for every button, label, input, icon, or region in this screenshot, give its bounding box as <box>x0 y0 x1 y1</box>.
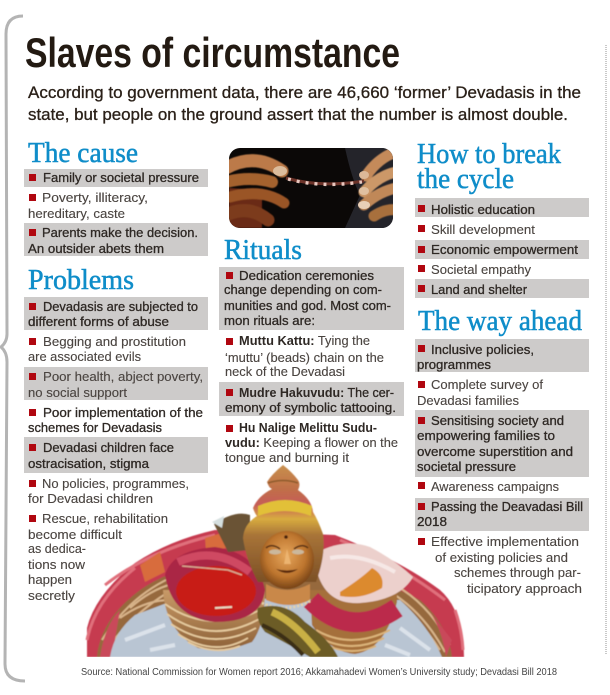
item: dedication ceremonies <box>219 267 404 330</box>
item: abuse <box>24 297 208 330</box>
item: complete survey: Devadasi families <box>417 393 519 408</box>
item: poor health: no social support <box>28 385 127 400</box>
item: complete survey <box>417 377 543 408</box>
plastic bag with offerings <box>318 543 413 603</box>
panel: rituals <box>219 235 404 465</box>
item: ostracisation: ostracisation, stigma <box>28 456 150 471</box>
item: poor implementation <box>28 405 203 435</box>
panel: problems <box>24 265 208 603</box>
item: hu nalige melittu suduvudu: vudu: Keeping a flower on the <box>225 435 398 450</box>
intro text: According to government data, there are 46,660 ‘former’ Devadasis in the <box>28 83 581 102</box>
item: ostracisation: Devadasi children face <box>43 440 174 455</box>
item: effective implementation: Effective implementation <box>431 534 579 549</box>
item: poor health: Poor health, abject poverty, <box>43 369 203 384</box>
item: sensitising society: empowering families to <box>417 428 555 443</box>
title: Slaves of circumstance <box>25 29 400 76</box>
item: holistic education <box>415 198 589 217</box>
panel: how to break the cycle <box>415 139 589 298</box>
item: poor implementation: schemes for Devadasis <box>28 420 162 435</box>
item: land and shelter: Land and shelter <box>431 282 528 297</box>
item: inclusive policies: programmes <box>417 357 492 372</box>
item: hu nalige melittu suduvudu: Hu Nalige Melittu Sudu- <box>239 420 377 435</box>
intro text: state, but people on the ground assert that the number is almost double. <box>28 105 568 124</box>
item: dedication ceremonies: mon rituals are: <box>224 313 315 328</box>
item: muttu kattu: Muttu Kattu: Tying the <box>239 333 370 348</box>
item: rescue: become difficult <box>28 527 122 542</box>
item: rescue: secretly <box>28 588 76 603</box>
item: rescue: tions now <box>28 557 86 572</box>
flowers behind deity <box>214 514 250 552</box>
heading: the cause: The cause <box>28 138 138 169</box>
item: muttu kattu: ‘muttu’ (beads) chain on the <box>225 350 384 365</box>
item: poverty <box>28 190 148 221</box>
heading: rituals: Rituals <box>224 235 302 266</box>
item: muttu kattu <box>225 333 384 379</box>
deity neck <box>266 584 310 605</box>
item: poor health <box>24 367 208 400</box>
outer basket <box>87 530 464 657</box>
item: sensitising society: overcome superstition and <box>417 444 573 459</box>
item: dedication ceremonies: change depending on com- <box>224 282 382 297</box>
heading: problems: Problems <box>28 265 134 296</box>
item: no policies <box>28 476 189 506</box>
item: effective implementation: of existing policies and <box>435 550 568 565</box>
item: hu nalige melittu suduvudu: tongue and burning it <box>225 450 349 465</box>
heading: the way ahead: The way ahead <box>418 306 582 337</box>
item: inclusive policies <box>415 339 589 372</box>
heading: how to break the cycle: the cycle <box>417 164 514 195</box>
item: no policies: for Devadasi children <box>28 491 153 506</box>
item: land and shelter <box>415 279 589 298</box>
item: poor implementation: Poor implementation of the <box>43 405 203 420</box>
item: sensitising society: societal pressure <box>417 459 516 474</box>
item: hu nalige melittu suduvudu <box>225 420 398 465</box>
heading: how to break the cycle <box>417 139 562 195</box>
item: mudre hakuvudu <box>219 382 404 416</box>
item: family or societal pressure: Family or societal pressure <box>43 170 199 185</box>
item: dedication ceremonies: Dedication ceremonies <box>239 268 375 283</box>
item: effective implementation: ticipatory approach <box>467 581 582 596</box>
item: holistic education: Holistic education <box>431 202 535 217</box>
item: economic empowerment: Economic empowerment <box>431 242 578 257</box>
source line: Source: National Commission for Women report 2016; Akkamahadevi Women’s University study; Devadasi Bill 2018 <box>81 667 558 678</box>
item: mudre hakuvudu: Mudre Hakuvudu: The cer- <box>239 385 394 400</box>
decorative side bracket <box>1 16 25 681</box>
item: ostracisation <box>24 437 208 473</box>
panel: the way ahead <box>415 306 589 596</box>
ground cloth <box>110 598 442 657</box>
photo: hands holding muttu bead chain <box>226 148 398 228</box>
item: abuse: different forms of abuse <box>28 314 169 329</box>
item: poverty: Poverty, illiteracy, <box>42 190 148 205</box>
intro text <box>28 83 581 124</box>
heading: how to break the cycle: How to break <box>417 139 562 170</box>
item: complete survey: Complete survey of <box>431 377 543 392</box>
item: sensitising society: Sensitising society and <box>431 413 564 428</box>
item: passing the bill <box>415 498 589 531</box>
item: effective implementation: schemes through par- <box>454 565 581 580</box>
panel: the cause <box>24 138 208 256</box>
deity face <box>260 531 314 589</box>
deity crown <box>243 465 324 582</box>
item: sensitising society <box>415 410 589 477</box>
item: begging: are associated evils <box>28 349 141 364</box>
banana <box>257 606 338 657</box>
item: rescue <box>28 511 168 603</box>
photo: deity mask with baskets <box>87 465 464 657</box>
item: mudre hakuvudu: emony of symbolic tattooing. <box>225 400 396 415</box>
left small basket <box>163 590 265 650</box>
item: no policies: No policies, programmes, <box>42 476 189 491</box>
item: parents decide: Parents make the decision. <box>42 225 198 240</box>
item: begging: Begging and prostitution <box>43 334 186 349</box>
item: economic empowerment <box>415 240 589 259</box>
item: awareness campaigns: Awareness campaigns <box>431 479 559 494</box>
item: effective implementation <box>418 534 582 596</box>
item: inclusive policies: Inclusive policies, <box>431 342 534 357</box>
item: parents decide <box>24 223 208 256</box>
item: parents decide: An outsider abets them <box>28 241 164 256</box>
item: begging <box>28 334 186 364</box>
right small basket <box>310 590 397 654</box>
item: dedication ceremonies: munities and god. Most com- <box>224 298 391 313</box>
item: rescue: as dedica- <box>28 541 86 556</box>
item: passing the bill: 2018 <box>417 514 447 529</box>
item: abuse: Devadasis are subjected to <box>43 299 198 314</box>
item: skill development: Skill development <box>431 222 535 237</box>
item: rescue: happen <box>28 572 72 587</box>
item: passing the bill: Passing the Deavadasi Bill <box>431 499 583 514</box>
item: poverty: hereditary, caste <box>28 206 125 221</box>
item: rescue: Rescue, rehabilitation <box>42 511 168 526</box>
item: societal empathy: Societal empathy <box>431 262 531 277</box>
item: muttu kattu: neck of the Devadasi <box>225 364 345 379</box>
